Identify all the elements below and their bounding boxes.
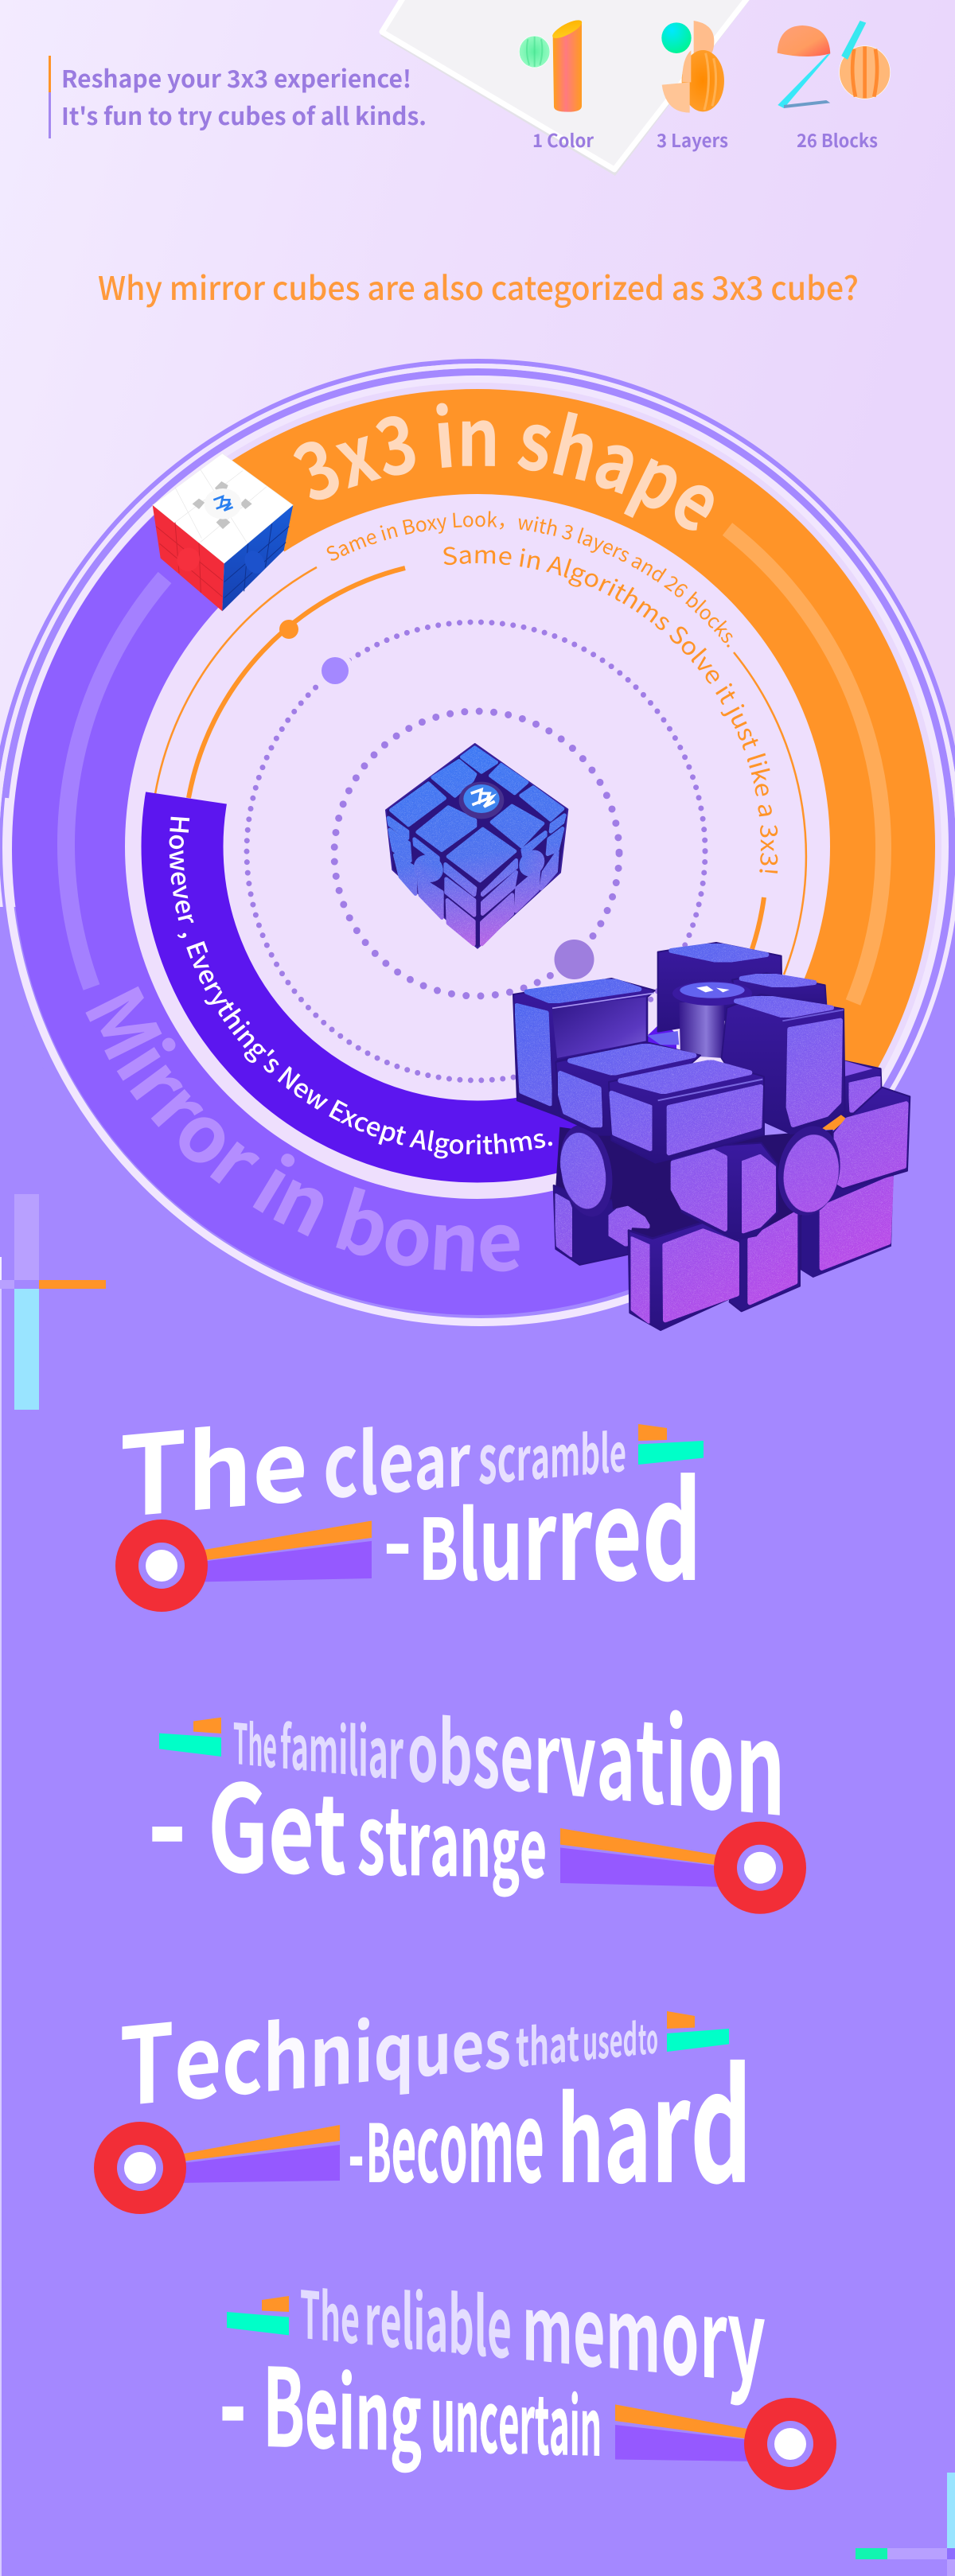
- concentric rings: [0, 361, 955, 1332]
- lower line: [349, 2005, 752, 2226]
- orbit dots: [316, 652, 598, 984]
- logo pillar: [672, 981, 752, 1058]
- target marker and wedges: [615, 2398, 836, 2490]
- upper line: [119, 1929, 658, 2137]
- lower line: hard: [557, 2005, 752, 2226]
- target marker and wedges: [115, 1520, 372, 1612]
- stat: 1 Color: [519, 17, 594, 153]
- L-shaped left piece: [513, 979, 655, 1116]
- purple band highlight: [66, 578, 165, 987]
- lower line: uncertain: [431, 2348, 602, 2482]
- stat: 3 Layers: [657, 21, 728, 153]
- upper line: to: [638, 2006, 658, 2068]
- back tall piece: [658, 943, 782, 1032]
- text on arc: algorithms: Same in Algorithms Solve it just like a 3x3!: [444, 547, 778, 874]
- small right block: [841, 1060, 882, 1118]
- stat: 1 Color: 1 Color: [532, 126, 594, 153]
- upper line: reliable: [364, 2249, 512, 2383]
- lower middle block: [730, 1212, 800, 1311]
- lower line: Become: [366, 2054, 544, 2213]
- lower line: Blurred: [419, 1426, 702, 1619]
- lower line: [147, 1716, 547, 1913]
- lower line: [219, 2302, 602, 2487]
- upper line: familiar: [280, 1688, 403, 1800]
- left cylinder piece: [553, 1121, 671, 1221]
- upper line: used: [583, 2002, 637, 2074]
- lower line: -: [349, 2092, 364, 2207]
- heading on arc: 3x3 in shape: 3x3 in shape: [293, 403, 714, 531]
- item 4: The reliable memory - Being uncertain: [219, 2207, 836, 2490]
- center piece: [671, 1143, 778, 1239]
- icon: small mirror cube: [386, 744, 567, 948]
- lower line: Get: [208, 1734, 346, 1909]
- lower left block: [554, 1185, 629, 1265]
- right cylinder piece: [771, 1121, 847, 1220]
- top white plate: [380, 0, 754, 176]
- stat: 3 Layers: 3 Layers: [657, 126, 728, 153]
- lower line: strange: [357, 1764, 547, 1905]
- tall right block: [722, 994, 845, 1134]
- flags: [667, 2011, 729, 2052]
- upper line: that: [516, 2000, 579, 2083]
- intro text block: [49, 56, 427, 138]
- upper line: The: [119, 1373, 308, 1549]
- target marker and wedges: [94, 2122, 340, 2214]
- intro text block: It's fun to try cubes of all kinds.: [61, 97, 427, 132]
- flags: [159, 1718, 221, 1757]
- dark violet arc with text: However , Everything's New Except Algorithms.: [169, 816, 552, 1158]
- lower line: -: [147, 1716, 187, 1912]
- orange arc band: [232, 389, 935, 1130]
- lower line: -: [384, 1472, 412, 1599]
- dark violet arc with text: [142, 792, 676, 1182]
- upper line: [300, 2207, 766, 2415]
- tile behind: [647, 1031, 679, 1045]
- upper line: The: [233, 1697, 277, 1784]
- front bar: [609, 1060, 764, 1163]
- inner disc: [125, 494, 830, 1199]
- icon: white GAN cube: [153, 453, 293, 611]
- upper line: scramble: [478, 1394, 626, 1504]
- mid bar: [555, 1042, 700, 1135]
- flags: [227, 2296, 289, 2335]
- upper line: [233, 1617, 785, 1853]
- upper line: The: [300, 2261, 360, 2364]
- lower line: Being: [263, 2321, 422, 2481]
- lower back arc piece: [610, 1193, 703, 1244]
- decoration: right cross: [856, 2473, 955, 2576]
- flags: [638, 1424, 704, 1465]
- upper line: Techniques: [119, 1944, 511, 2137]
- item 3: Techniques that used to - Become hard: [94, 1929, 752, 2226]
- lower right block: [801, 1175, 894, 1278]
- upper line: [119, 1344, 626, 1549]
- intro text block: Reshape your 3x3 experience!: [61, 60, 411, 95]
- top right piece: [732, 973, 826, 1010]
- front bottom block: [629, 1223, 739, 1330]
- item 2: The familiar observation - Get strange: [147, 1617, 806, 1914]
- stat: 26 Blocks: [778, 21, 891, 153]
- stat: 26 Blocks: 26 Blocks: [797, 126, 878, 153]
- text on arc: boxy look: Same in Boxy Look，with 3 layers and 26 blocks.: [326, 511, 732, 648]
- icon: exploded mirror cube: [513, 943, 910, 1330]
- upper right block: [833, 1088, 910, 1189]
- heading on arc: Mirror in bone: Mirror in bone: [86, 986, 520, 1271]
- upper line: memory: [522, 2228, 766, 2415]
- lower line: -: [219, 2302, 247, 2487]
- upper line: clear: [323, 1383, 470, 1523]
- title: Why mirror cubes are also categorized as 3x3 cube?: [98, 262, 859, 309]
- dotted orbits: [247, 622, 705, 1080]
- orange guide arcs: [155, 567, 806, 975]
- orange band highlight: [727, 529, 883, 1002]
- target marker and wedges: [560, 1822, 806, 1914]
- upper line: observation: [407, 1633, 785, 1853]
- purple arc band: [12, 516, 629, 1315]
- core body: [555, 1127, 833, 1270]
- item 1: The clear scramble - Blurred: [115, 1344, 704, 1619]
- decoration: left cross: [0, 1194, 106, 1410]
